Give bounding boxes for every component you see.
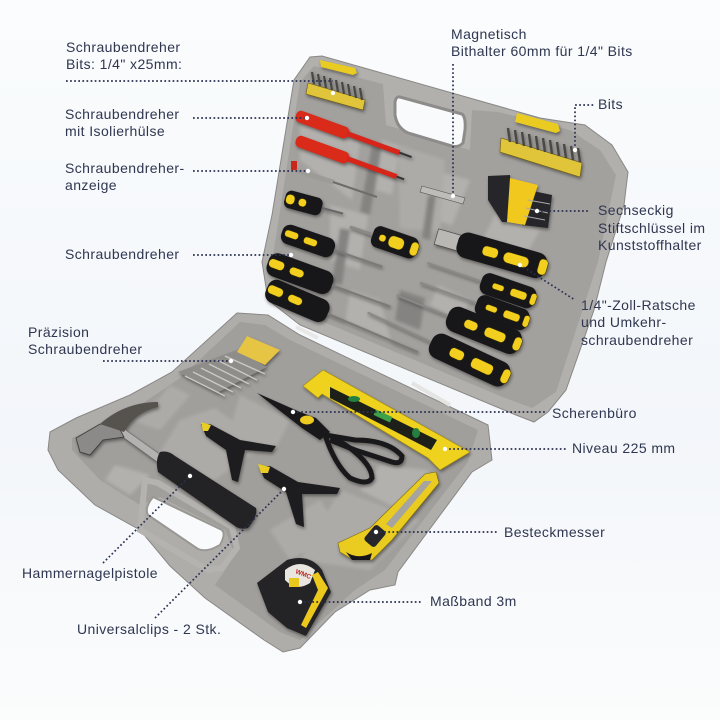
label: knife: Besteckmesser [504,524,605,540]
icon: spirit level [303,370,470,470]
icon: tape measure [257,558,331,636]
label: hex keys: Sechseckig [598,202,674,218]
label: ratchet: schraubendreher [581,332,693,348]
voltage indicator screwdriver [291,161,377,197]
red screwdrivers [294,109,414,185]
label: clips: Universalclips - 2 Stk. [77,621,221,637]
callout lines [66,64,595,618]
label: indicator: anzeige [65,177,117,193]
label: precision: Präzision [28,324,89,340]
black screwdrivers [262,189,551,390]
label: bits: Schraubendreher [66,39,180,55]
label: insulated screwdrivers: Schraubendreher [65,106,180,122]
label: scissors: Scherenbüro [552,405,637,421]
handle opening [395,97,465,147]
label: hammer: Hammernagelpistole [22,565,158,581]
label: hex keys: Kunststoffhalter [598,237,702,253]
icon: bit holder upper left [306,60,365,110]
label: insulated screwdrivers: mit Isolierhülse [65,123,165,139]
label: indicator: Schraubendreher- [65,160,185,176]
marker dots [188,91,577,604]
label: hex keys: Stiftschlüssel im [598,220,706,236]
icon: utility knife [338,472,439,560]
hinges [296,327,450,405]
label: bits right: Bits [598,96,623,112]
upper case panel [262,56,628,422]
lower case panel [48,313,492,652]
label: level: Niveau 225 mm [572,440,676,456]
label: ratchet: und Umkehr- [581,314,667,330]
icon: bit holder upper right [500,113,582,177]
label: magnetic holder: Magnetisch [451,26,527,42]
label: magnetic holder: Bithalter 60mm für 1/4" Bits [451,43,633,59]
label: screwdrivers: Schraubendreher [65,246,180,262]
label: ratchet: 1/4"-Zoll-Ratsche [581,297,696,313]
icon: clamp 1 [201,422,276,482]
icon: hammer [76,402,256,529]
icon: scissors [257,393,402,482]
magnetic bit holder [420,186,465,204]
handle opening [147,497,224,550]
icon: hex key set [488,175,552,228]
label: precision: Schraubendreher [28,341,142,357]
icon: clamp 2 [258,464,340,527]
label: bits: Bits: 1/4" x25mm: [66,56,182,72]
icon: precision screwdrivers [178,336,280,396]
icon: tape measure: WMC [294,568,312,581]
label: tape: Maßband 3m [430,593,517,609]
